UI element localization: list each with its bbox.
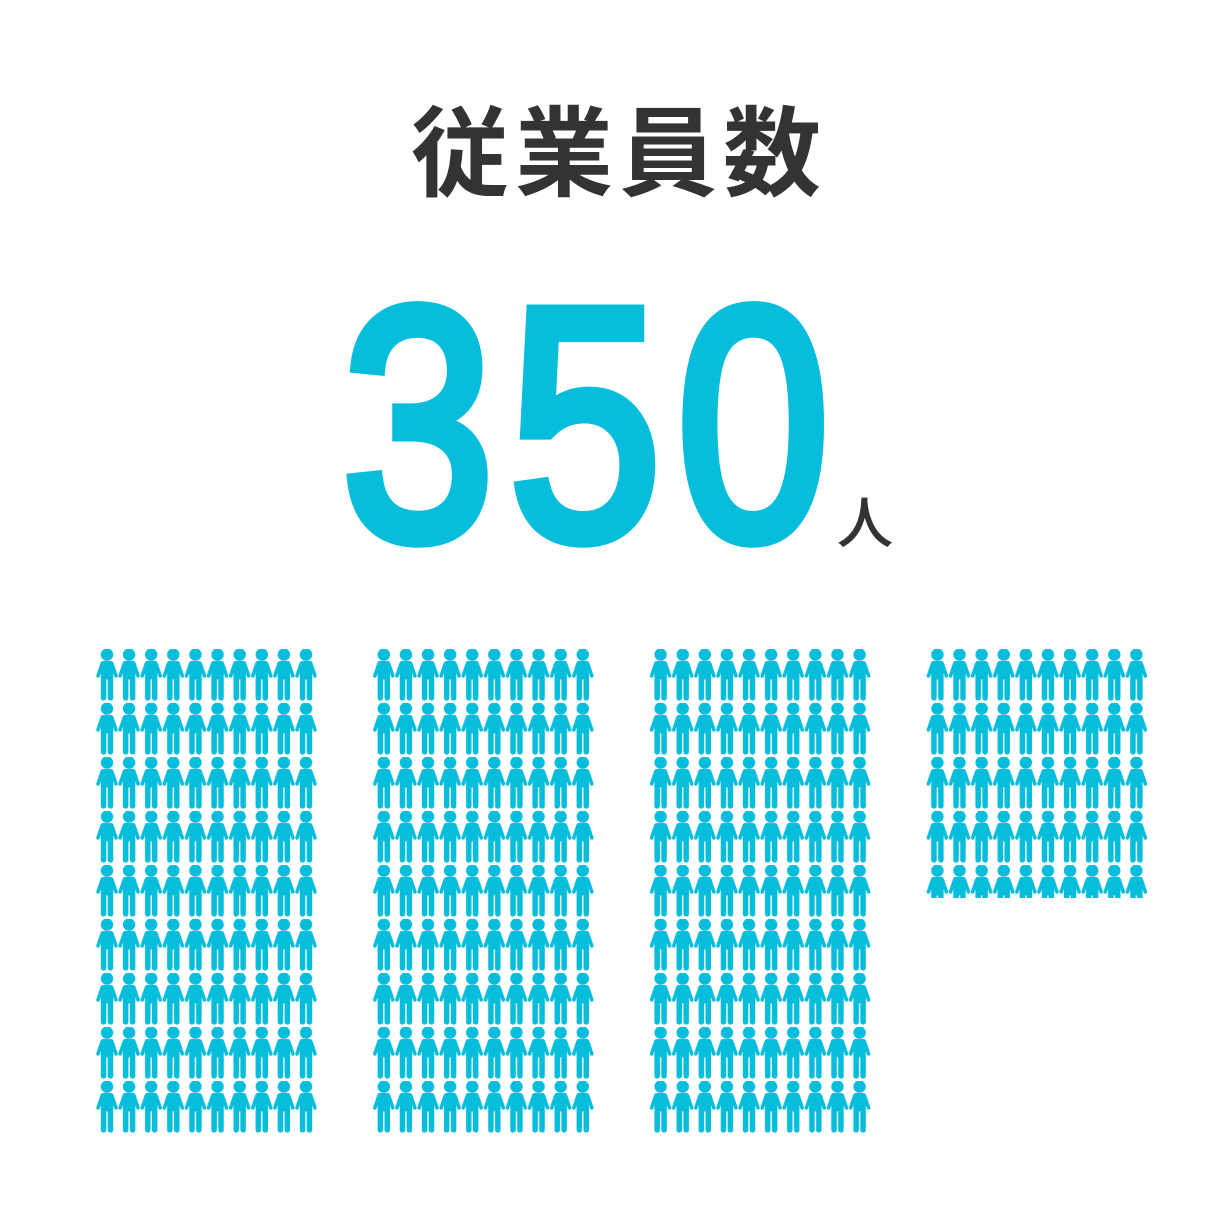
headcount number: [342, 240, 829, 609]
pictogram group: 100 people: [373, 649, 594, 1135]
pictogram group: 50 people: [926, 649, 1148, 898]
pictogram group: 100 people: [96, 649, 317, 1135]
headcount number: 3: [342, 240, 494, 609]
unit label: 人: [838, 494, 892, 554]
pictogram group: 100 people: [650, 649, 871, 1135]
headcount number: 5: [509, 240, 661, 609]
headcount number: 0: [677, 240, 829, 609]
title: 従業員数: [411, 99, 827, 209]
